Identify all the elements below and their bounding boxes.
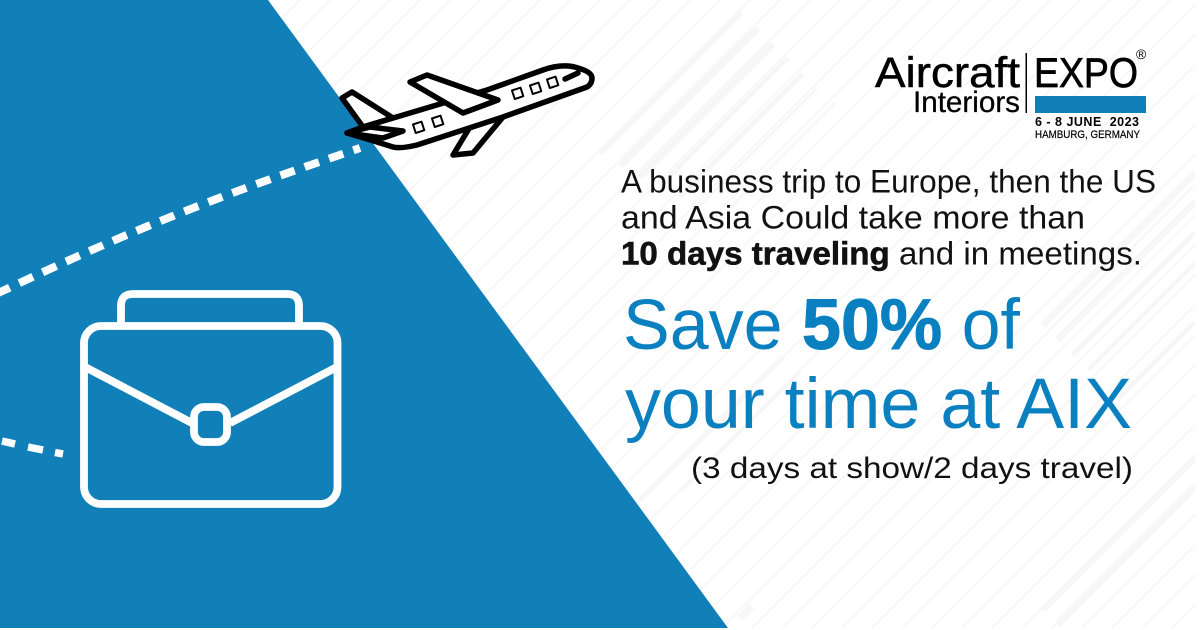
text block: business trip intro: A business trip to Europe, then the US: [621, 164, 1156, 200]
dashed flight path: lower: [2, 441, 63, 454]
text block: business trip intro: and Asia Could take more than: [621, 200, 1085, 236]
text block: business trip intro: 10 days traveling and in meetings.: [621, 236, 1142, 272]
heading: save 50 percent: your time at AIX: [625, 365, 1132, 444]
logo: Aircraft Interiors Expo: EXPO: [1034, 49, 1138, 96]
text block: business trip intro: [621, 164, 1156, 272]
text block: show and travel days: (3 days at show/2 days travel): [691, 452, 1133, 485]
dashed flight path: upper: [0, 148, 360, 294]
logo: Aircraft Interiors Expo: [875, 46, 1147, 141]
icon: briefcase: [84, 294, 338, 504]
logo: Aircraft Interiors Expo: Aircraft: [875, 49, 1020, 97]
icon: airplane: [342, 66, 592, 155]
heading: save 50 percent: [623, 286, 1132, 444]
panel: blue diagonal background: [0, 0, 728, 628]
heading: save 50 percent: Save 50% of: [623, 286, 1020, 365]
logo: Aircraft Interiors Expo: 6 - 8 JUNE 2023: [1035, 115, 1139, 129]
logo: Aircraft Interiors Expo: ®: [1136, 46, 1147, 62]
logo: Aircraft Interiors Expo: Interiors: [913, 86, 1020, 119]
logo: Aircraft Interiors Expo: HAMBURG, GERMANY: [1035, 129, 1141, 141]
